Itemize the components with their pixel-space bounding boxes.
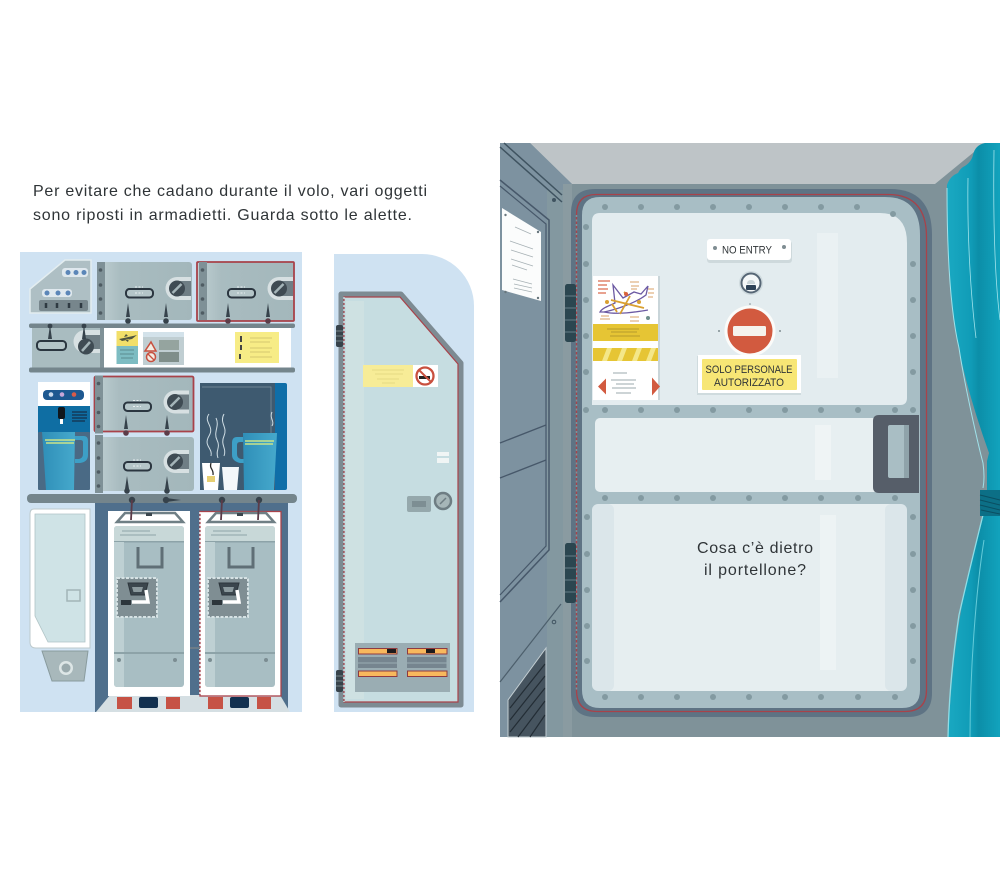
door question text: Cosa c’è dietro	[697, 540, 813, 557]
icon: door indicator	[739, 271, 763, 295]
rivets	[583, 204, 916, 700]
sign: authorized personnel only	[697, 355, 801, 395]
icon: no entry sign	[718, 303, 781, 356]
sticker: warning	[143, 332, 184, 365]
icon: hinges	[565, 284, 576, 603]
intro text	[33, 183, 427, 224]
ceiling	[530, 143, 985, 184]
icon: hinges	[336, 325, 343, 692]
icon: waste flap	[42, 651, 88, 681]
icon: jug	[42, 432, 88, 490]
sticker: instructions	[235, 332, 279, 363]
panel: cabin door scene	[500, 143, 1000, 737]
shelf with stickers	[29, 324, 295, 372]
icon: cups	[202, 463, 239, 490]
icon: vent	[508, 648, 546, 737]
curtain	[947, 143, 1000, 737]
cabinet: top right with red outline	[197, 262, 294, 324]
door handle	[873, 415, 919, 493]
door latch	[407, 452, 451, 512]
panel: side door	[334, 254, 474, 712]
intro text: Per evitare che cadano durante il volo, vari oggetti	[33, 183, 427, 200]
door question text	[697, 540, 813, 579]
sign: authorized personnel only: SOLO PERSONALE	[706, 364, 792, 376]
notice on wall	[502, 208, 541, 301]
door question text: il portellone?	[704, 562, 806, 579]
door: waste panel	[30, 509, 90, 648]
trolley: right with red outline	[200, 512, 281, 709]
hot drinks station	[200, 383, 287, 490]
water dispenser with jug	[38, 382, 90, 490]
label plate	[355, 643, 450, 692]
trolley bay	[95, 503, 290, 712]
side wall	[500, 143, 572, 737]
panel: galley storage	[20, 252, 302, 712]
cabinet: top left	[97, 262, 192, 324]
cabinet: lower	[95, 435, 194, 493]
poster: safety card	[593, 276, 660, 400]
sign: authorized personnel only: AUTORIZZATO	[714, 377, 784, 389]
cabinet: middle with red outline	[94, 376, 194, 436]
trolley: left	[108, 511, 190, 709]
plate: no entry: NO ENTRY	[722, 244, 773, 256]
intro text: sono riposti in armadietti. Guarda sotto le alette.	[33, 207, 412, 224]
sign: no smoking	[363, 365, 438, 387]
door panels	[592, 213, 907, 691]
plate: no entry	[707, 239, 792, 263]
icon: control panel	[30, 260, 91, 313]
door with red seal	[341, 294, 461, 705]
icon: jug	[232, 433, 277, 490]
door frame	[571, 189, 932, 717]
main shelf with latches	[27, 488, 297, 520]
sticker: plane	[116, 331, 138, 364]
icon: plane diagram	[600, 285, 650, 320]
